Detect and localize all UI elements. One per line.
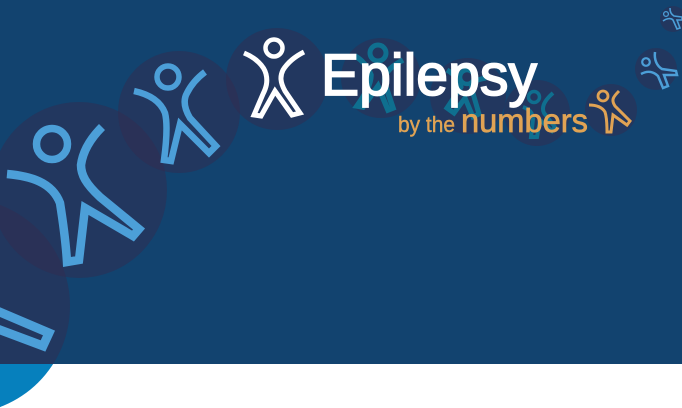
white lower band [0, 364, 682, 408]
figure circle 5: teal figure behind title [341, 38, 421, 118]
figure circle 8: orange figure [585, 84, 637, 136]
figure circle 2: large light blue figure [0, 102, 167, 278]
subtitle: numbers [461, 102, 588, 139]
figure circle 1: bottom-left partial light blue figure [0, 198, 70, 408]
title: Epilepsy [321, 43, 537, 108]
bright blue circle segment on white band [0, 364, 53, 408]
figure circle 7: teal figure behind subtitle [504, 80, 570, 146]
figure circle 6: teal figure behind title [430, 58, 506, 134]
figure circle 10: tiny light blue figure [660, 6, 682, 32]
figure circle 3: medium light blue figure [118, 51, 240, 173]
figure circle 4: white figure [226, 28, 328, 130]
subtitle: by the [398, 112, 455, 137]
subtitle [398, 102, 588, 139]
figure circle 9: small light blue figure [635, 48, 677, 90]
